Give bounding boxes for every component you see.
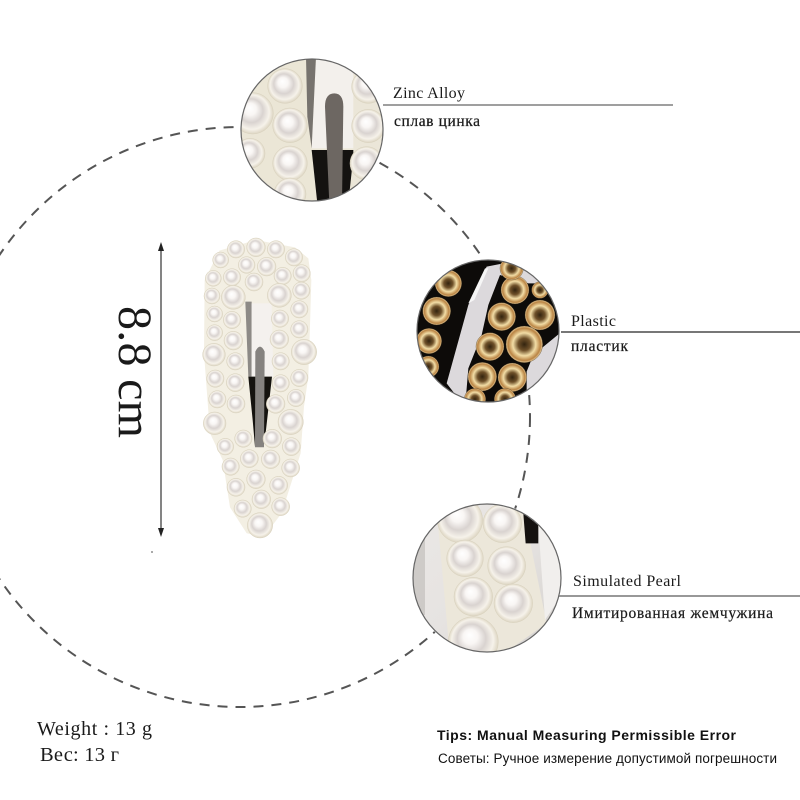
pearls: [203, 238, 317, 538]
label: plastic english: Plastic: [571, 313, 616, 330]
large dashed circle: [0, 127, 530, 707]
label: plastic russian: пластик: [571, 338, 628, 355]
tips english: Tips: Manual Measuring Permissible Error: [437, 727, 737, 743]
weight russian: Вес: 13 г: [40, 744, 119, 766]
dimension arrow: [152, 242, 164, 553]
dimension label: 8.8 cm: [108, 306, 161, 438]
tips russian: Советы: Ручное измерение допустимой погрешности: [438, 751, 777, 766]
metal slot: [245, 302, 273, 447]
label: simulated pearl russian: Имитированная жемчужина: [572, 605, 773, 622]
product: pearl hair clip: [203, 238, 317, 538]
leader line: simulated pearl: [559, 595, 800, 597]
leader line: zinc alloy: [383, 104, 673, 106]
clip base: [204, 240, 311, 537]
weight english: Weight : 13 g: [37, 718, 152, 740]
label: zinc alloy russian: сплав цинка: [394, 113, 480, 130]
detail circle: simulated pearl: [412, 503, 562, 653]
label: simulated pearl english: Simulated Pearl: [573, 573, 682, 590]
label: zinc alloy english: Zinc Alloy: [393, 85, 465, 102]
leader line: plastic: [561, 331, 800, 333]
detail circle: plastic: [416, 259, 560, 403]
detail circle: zinc alloy: [240, 58, 384, 202]
